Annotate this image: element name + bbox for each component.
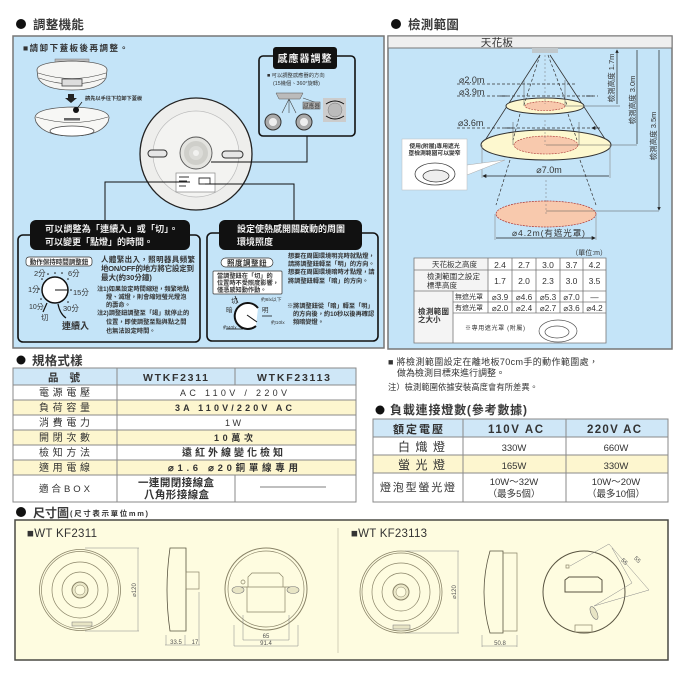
panel: sensor adjustment: 感應器調整 bbox=[278, 52, 332, 65]
table: detection size: 檢測範圍之設定 bbox=[427, 271, 480, 281]
table: detection size: 2.7 bbox=[518, 260, 530, 270]
table: detection size: 3.7 bbox=[566, 260, 578, 270]
chart: time dial: 2分 bbox=[34, 269, 46, 278]
table: detection size: 之大小 bbox=[418, 314, 441, 324]
table: detection size: ⌀2.7 bbox=[540, 304, 557, 313]
panel: brightness setting: 設定使熱感開關啟動的周圍 bbox=[237, 223, 345, 234]
table: load count: 10W～20W bbox=[592, 477, 640, 488]
icon: device with cover bbox=[37, 59, 107, 90]
icon: WTKF23113 side view: 50.8 bbox=[494, 641, 506, 647]
table: detection size: 標準高度 bbox=[427, 280, 458, 290]
text: brightness description: 將調整鈕轉至「暗」的方向。 bbox=[288, 277, 368, 285]
panel: sensor adjustment bbox=[259, 47, 355, 136]
table: load count: 白熾燈 bbox=[398, 439, 445, 454]
label: height 3.5m: 檢測高度 3.5m bbox=[648, 112, 658, 160]
table: detection size: 3.0 bbox=[542, 260, 554, 270]
note: off position: 僅憑感知動作動。 bbox=[217, 286, 266, 294]
table: detection size bbox=[414, 258, 606, 343]
table: load count: 165W bbox=[502, 461, 526, 472]
note: off position: 當調整鈕在「切」的 bbox=[217, 272, 273, 280]
chart: time dial bbox=[28, 269, 89, 331]
icon: WTKF2311 back view: 91.4 bbox=[260, 641, 272, 647]
table: detection size: 2.3 bbox=[542, 276, 554, 286]
icon: sensor beam bbox=[265, 93, 320, 130]
note: rotation: (15幾個、360°旋轉) bbox=[273, 79, 320, 87]
text: time setting description: 人體緊出入，照明器具頻繁 bbox=[101, 254, 196, 264]
panel: time setting: 可以調整為「連續入」或「切」。 bbox=[45, 223, 178, 234]
panel: detection range bbox=[388, 36, 672, 349]
icon: WTKF2311 side view: 17 bbox=[192, 640, 199, 646]
note: off position: 位置時不受照度影響， bbox=[217, 279, 279, 287]
text: range setting note: ■ 將檢測範圍設定在離地板70cm手的動作範圍處， bbox=[388, 356, 598, 367]
table: load count: （最多10個） bbox=[587, 488, 645, 500]
table: detection size: 3.0 bbox=[566, 276, 578, 286]
note: sensor direction: ■ 可以調整感應器的方向 bbox=[267, 71, 325, 79]
table: detection size: ⌀2.0 bbox=[492, 304, 509, 313]
text: notes: 注1)如果設定時間縮短，頻繁地點 bbox=[97, 285, 189, 293]
text: brightness note: 頻暗變燈。 bbox=[293, 318, 324, 326]
label: hold time dial: 動作保持時間調整鈕 bbox=[30, 257, 89, 266]
label: diameter 3.6m: ⌀3.6m bbox=[458, 118, 483, 128]
table: detection size: — bbox=[590, 293, 599, 302]
table: specifications: 遠紅外線變化檢知 bbox=[182, 446, 283, 459]
callout: light shield bbox=[402, 139, 505, 190]
label: diameter 2.0m: ⌀2.0m bbox=[459, 75, 484, 85]
icon: WTKF2311 front view: ⌀120 bbox=[132, 583, 138, 597]
icon: WTKF23113 side view bbox=[482, 551, 517, 647]
text: change lighting time: 可以變更「點燈」的時間。 bbox=[45, 236, 153, 247]
table: load count: 220V AC bbox=[587, 424, 641, 436]
label: ceiling bbox=[388, 36, 672, 49]
text: brightness description: 想要在周圍環境明亮時就點燈， bbox=[288, 252, 375, 260]
icon: large switch front view bbox=[140, 98, 252, 210]
chart: detection cones bbox=[457, 48, 659, 240]
panel: dimensions bbox=[15, 520, 668, 660]
heading: adjustment functions bbox=[16, 17, 84, 32]
table: load count: 燈泡型螢光燈 bbox=[380, 480, 455, 494]
heading: specifications: 規格式樣 bbox=[32, 353, 83, 368]
label: diameter 4.2m: ⌀4.2m(有遮光罩) bbox=[512, 228, 585, 238]
label: unit: （單位:m） bbox=[571, 248, 607, 257]
icon: WTKF2311 side view: 33.5 bbox=[170, 640, 182, 646]
table: detection size: ⌀4.2 bbox=[586, 304, 603, 313]
table: detection size: 4.2 bbox=[589, 260, 601, 270]
label: diameter 7.0m: ⌀7.0m bbox=[536, 165, 562, 175]
arrow: pull down bbox=[65, 94, 77, 103]
table: load count: 螢光燈 bbox=[398, 457, 445, 472]
icon: rotating sensor bbox=[323, 98, 346, 122]
table: specifications: 適合BOX bbox=[39, 483, 91, 495]
text: notes: 注2)調整鈕調整至「竭」就停止的 bbox=[97, 309, 189, 317]
table: load count: 660W bbox=[604, 443, 628, 454]
panel: time setting bbox=[18, 220, 200, 342]
chart: time dial: 10分 bbox=[29, 303, 44, 311]
text: ambient illumination: 環境照度 bbox=[237, 236, 273, 247]
table: detection size: 天花板之高度 bbox=[432, 259, 478, 269]
table: detection size: ⌀3.6 bbox=[563, 304, 580, 313]
table: detection size: ⌀3.9 bbox=[492, 293, 509, 302]
table: specifications: 1W bbox=[225, 418, 242, 428]
label: diameter 3.9m: ⌀3.9m bbox=[459, 87, 484, 97]
text: notes: 燈、滅燈，則會縮短螢光燈泡 bbox=[106, 293, 187, 301]
label: sensor: 感應器 bbox=[303, 102, 320, 110]
chart: brightness dial bbox=[223, 296, 285, 331]
text: height note: 注）檢測範圍依據安裝高度會有所差異。 bbox=[388, 382, 538, 392]
icon: WTKF2311 back view bbox=[225, 548, 307, 647]
label: hold time dial bbox=[26, 257, 92, 266]
table: specifications: 3A 110V/220V AC bbox=[175, 403, 292, 413]
text: brightness note: ※將調整鈕從「暗」轉至「明」 bbox=[287, 302, 374, 310]
chart: brightness dial: 約40lx bbox=[223, 324, 237, 331]
label: ceiling: 天花板 bbox=[481, 36, 513, 49]
icon: WTKF23113 front view: ⌀120 bbox=[452, 585, 458, 599]
heading: detection range: 檢測範圍 bbox=[408, 17, 459, 32]
icon: WTKF23113 back view: 55 bbox=[619, 558, 629, 567]
heading: load count: 負載連接燈數(參考數據) bbox=[390, 402, 527, 417]
icon: WTKF23113 back view bbox=[543, 544, 649, 633]
table: specifications: WTKF2311 bbox=[143, 372, 208, 384]
heading: adjustment functions: 調整機能 bbox=[33, 17, 84, 32]
callout: light shield: 使用(附屬)專用遮光 bbox=[409, 142, 460, 150]
table: detection size: ⌀2.4 bbox=[516, 304, 533, 313]
table: specifications: AC 110V / 220V bbox=[180, 388, 287, 398]
note: pull the cover off: 請先以手往下拉卸下蓋板 bbox=[85, 94, 143, 102]
label: height 1.7m: 檢測高度 1.7m bbox=[606, 54, 616, 102]
table: specifications: WTKF23113 bbox=[257, 372, 330, 384]
icon: WTKF2311 front view bbox=[40, 548, 139, 631]
label: height 3.0m: 檢測高度 3.0m bbox=[627, 76, 637, 124]
label: brightness dial: 照度調整鈕 bbox=[227, 258, 267, 268]
table: detection size: ⌀4.6 bbox=[516, 293, 533, 302]
table: detection size: 3.5 bbox=[589, 276, 601, 286]
table: specifications: 適用電線 bbox=[39, 461, 90, 474]
table: load count: 330W bbox=[604, 461, 628, 472]
table: detection size: ※專用遮光罩 (附屬) bbox=[465, 324, 525, 332]
chart: time dial: 切 bbox=[41, 313, 49, 322]
chart: time dial: 30分 bbox=[63, 304, 79, 313]
heading: dimensions: 尺寸圖 bbox=[33, 505, 69, 520]
text: notes: 的壽命。 bbox=[106, 301, 131, 309]
connector lines bbox=[105, 136, 307, 221]
table: load count: 330W bbox=[502, 443, 526, 454]
table: detection size: 無遮光罩 bbox=[455, 292, 483, 301]
chart: time dial: 連續入 bbox=[62, 320, 89, 331]
instruction: remove cover first: ■請卸下蓋板後再調整。 bbox=[23, 43, 128, 53]
icon: WTKF23113 front view bbox=[360, 551, 459, 633]
table: specifications: 電源電壓 bbox=[39, 386, 90, 399]
table: load count: 10W～32W bbox=[490, 477, 538, 488]
icon: WTKF2311 back view: 65 bbox=[263, 634, 270, 640]
table: specifications: ⌀1.6 ⌀20銅單線專用 bbox=[168, 462, 298, 474]
table: detection size: 2.0 bbox=[518, 276, 530, 286]
text: range setting note: 做為檢測目標來進行調整。 bbox=[397, 367, 505, 378]
table: specifications: 消費電力 bbox=[39, 416, 90, 429]
chart: brightness dial: 約6lx以下 bbox=[261, 296, 282, 303]
table: load count: 額定電壓 bbox=[393, 422, 443, 436]
chart: brightness dial: 暗 bbox=[226, 305, 233, 314]
table: detection size: ⌀5.3 bbox=[540, 293, 557, 302]
label: WTKF2311: ■WT KF2311 bbox=[27, 528, 97, 540]
text: time setting description: 最大(約30分鐘) bbox=[101, 272, 152, 282]
note: off position bbox=[213, 271, 282, 294]
table: load count: 110V AC bbox=[488, 424, 543, 436]
heading: dimensions: (尺寸表示單位mm) bbox=[70, 508, 148, 518]
table: specifications bbox=[13, 368, 356, 502]
callout: light shield: 罩檢測範圍可以變窄 bbox=[408, 149, 461, 157]
table: specifications: 負荷容量 bbox=[39, 401, 90, 414]
table: specifications: 品號 bbox=[48, 371, 80, 384]
table: specifications: 一連開閉接線盒 bbox=[138, 476, 214, 489]
text: notes: 位置，即使調整至點與點之間 bbox=[106, 318, 186, 326]
table: detection size: 2.4 bbox=[494, 260, 506, 270]
text: notes: 也無法設定時間。 bbox=[106, 327, 156, 335]
label: WTKF23113: ■WT KF23113 bbox=[351, 528, 427, 540]
chart: time dial: 6分 bbox=[68, 269, 80, 278]
heading: dimensions bbox=[16, 505, 148, 520]
chart: time dial: 1分 bbox=[28, 285, 40, 294]
table: load count: （最多5個） bbox=[488, 488, 540, 500]
chart: brightness dial: 約10lx bbox=[271, 319, 285, 326]
panel: brightness setting bbox=[207, 220, 378, 341]
text: brightness description: 想要在周圍環境暗時才點燈，請 bbox=[288, 268, 375, 276]
icon: device without cover bbox=[35, 102, 109, 136]
table: detection size: ⌀7.0 bbox=[563, 293, 580, 302]
label: brightness dial bbox=[221, 258, 273, 268]
table: load count bbox=[373, 419, 668, 502]
text: brightness description: 請將調整鈕轉至「明」的方向。 bbox=[288, 260, 375, 268]
text: time setting description: 地ON/OFF的地方將它設定到 bbox=[101, 263, 194, 273]
table: specifications: 檢知方法 bbox=[39, 446, 90, 459]
table: detection size: 1.7 bbox=[494, 276, 506, 286]
panel: adjustment functions bbox=[13, 36, 384, 348]
text: brightness note: 的方向後，約10秒以後再確認 bbox=[293, 310, 375, 318]
table: specifications: 開閉次數 bbox=[39, 431, 90, 444]
icon: WTKF2311 side view bbox=[165, 548, 200, 646]
table: detection size: 檢測範圍 bbox=[418, 306, 449, 316]
chart: brightness dial: 明 bbox=[262, 306, 269, 314]
chart: brightness dial: 切 bbox=[231, 297, 238, 305]
table: detection size: 有遮光罩 bbox=[455, 303, 483, 312]
icon: WTKF23113 back view: 55 bbox=[632, 556, 642, 565]
table: specifications: 八角形接線盒 bbox=[144, 488, 210, 501]
table: specifications: 10萬次 bbox=[214, 432, 253, 443]
chart: time dial: 15分 bbox=[73, 288, 89, 297]
